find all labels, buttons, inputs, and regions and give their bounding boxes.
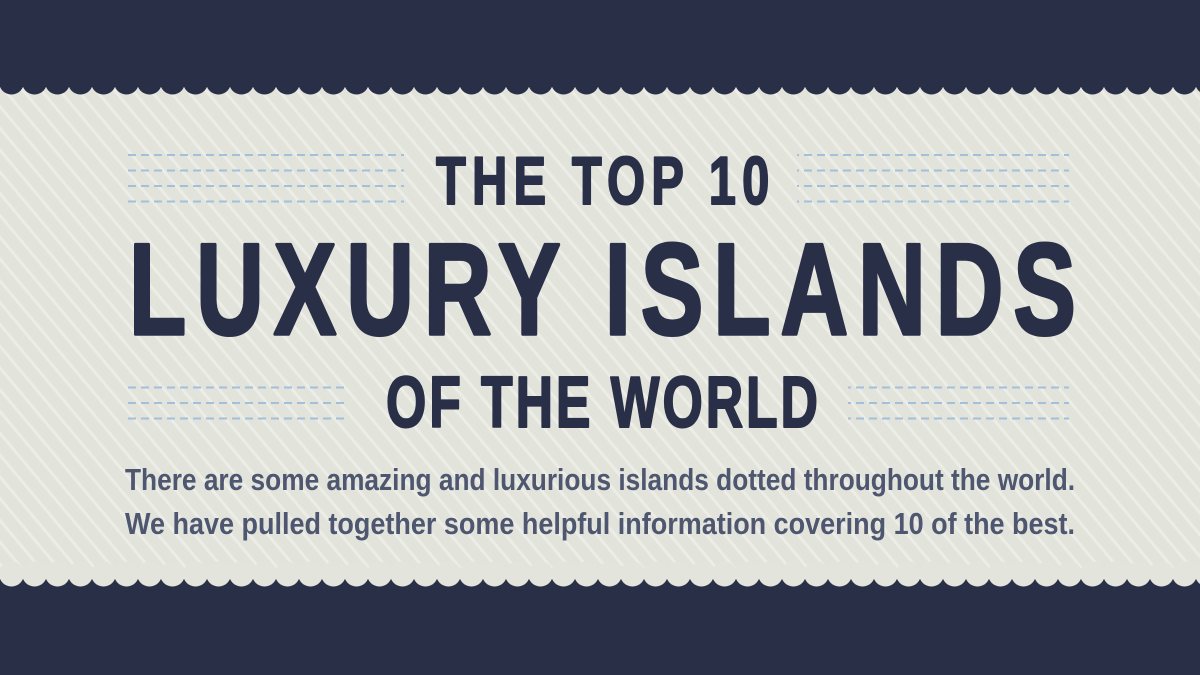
dashed lines: top left (128, 154, 404, 204)
subtitle text (125, 462, 1075, 541)
dashed lines: bottom left (128, 376, 348, 426)
subtitle text: There are some amazing and luxurious islands dotted throughout the world. (125, 462, 1075, 497)
title line 3: OF THE WORLD (386, 363, 818, 443)
title line 2: LUXURY ISLANDS (129, 217, 1076, 363)
title line 1: THE TOP 10 (436, 142, 769, 219)
title (129, 142, 1076, 443)
dashed lines: top right (797, 154, 1069, 204)
dashed lines: bottom right (848, 376, 1069, 426)
subtitle text: We have pulled together some helpful information covering 10 of the best. (125, 506, 1075, 541)
top navy band with scallops (0, 0, 1200, 95)
bottom navy band with scallops (0, 560, 1200, 675)
